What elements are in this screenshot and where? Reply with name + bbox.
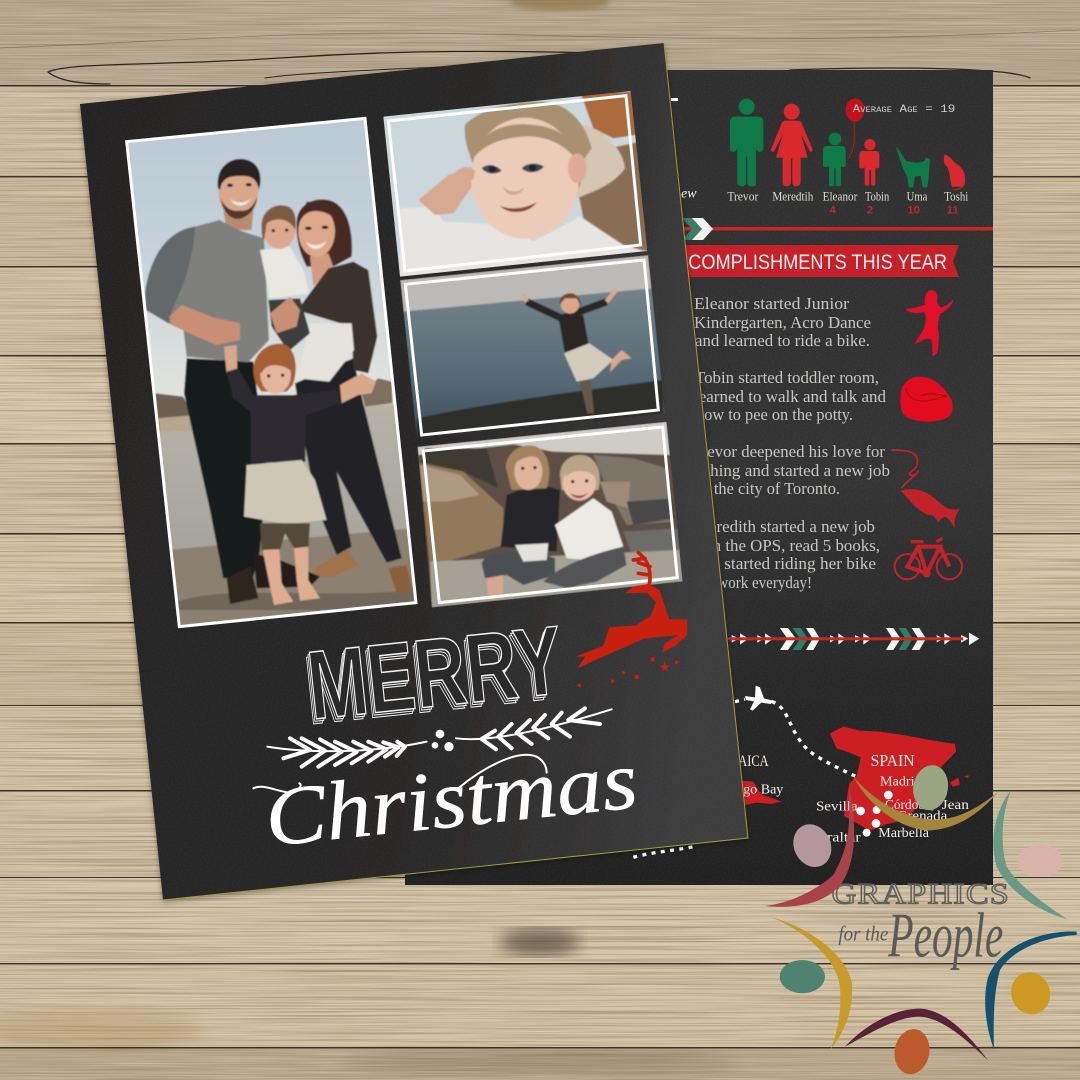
divider arrow with chevrons [670,218,993,240]
labels: family names: Tobin [865,189,890,203]
text: Tobin accomplishment: Tobin started toddler room, [695,368,879,387]
text: Meredith accomplishment [716,520,879,592]
text: Trevor accomplishment: fishing and started a new job [693,461,890,480]
text: Meredith accomplishment: and started riding her bike [695,554,876,573]
icon: potty / bean bag [900,377,953,422]
logo text: People [888,901,1003,971]
icon: Tobin figure [859,139,879,186]
text: Meredith accomplishment: to work everyday! [702,573,812,592]
map: Spain: Jean [942,797,969,812]
text: Tobin accomplishment: learned to walk and talk and [694,387,887,406]
text: Trevor accomplishment [708,445,890,498]
dancing girl [523,290,632,413]
photo: two kids on rocks [417,422,683,608]
text: Trevor accomplishment: in the city of Toronto. [697,479,840,498]
icon: dancing child [905,290,953,356]
map: Spain: Marbella [878,825,929,840]
banner: accomplishments [686,245,959,277]
flight route [633,699,880,857]
decorative branch with berries [267,708,612,767]
arrow divider with chevrons [728,628,979,650]
labels: family names: Eleanor [823,189,858,203]
labels: family names: Meredtih [772,189,814,203]
labels: family names: Toshi [944,189,969,203]
script fragment: ew [681,186,697,201]
text: Eleanor accomplishment [694,297,870,346]
labels: ages: 11 [947,205,959,217]
text: Tobin accomplishment: how to pee on the potty. [696,405,853,424]
logo figure: yellow [770,917,852,1049]
toddler [260,205,310,352]
logo figure: olive [853,762,998,831]
icon: Toshi cat [944,154,965,190]
title: MERRY: MERRY [301,608,566,743]
logo figure: maroon [845,1009,988,1077]
text: Eleanor accomplishment: Eleanor started Junior [694,294,850,313]
text: Eleanor accomplishment: and learned to ride a bike. [695,331,870,350]
man [145,159,320,604]
woman [295,199,413,593]
map: Spain: SPAIN [871,751,915,770]
logo figure: green [993,791,1067,919]
title: MERRY: MERRY [302,605,567,740]
icon: fish on a hook [892,450,960,528]
icon: airplane [745,686,773,711]
icon: Uma cat [896,147,930,187]
map: Jamaica: JAMAICA [713,753,769,770]
labels: family names: Uma [907,189,928,203]
photo: girl dancing by the water [400,255,665,438]
title: Christmas: Christmas [261,734,642,865]
text: Tobin accomplishment [694,368,887,424]
icon: red reindeer [575,553,687,687]
map: travel route [633,686,969,857]
photo: family on the beach [120,110,427,633]
logo text: for the [838,924,888,946]
icon: Eleanor figure with balloon [823,98,864,186]
map: Spain: Córdoba, [885,797,934,812]
map: Spain [817,726,970,842]
photo: toddler close up [380,85,653,285]
title: MERRY: MERRY [300,610,565,745]
labels: family names [728,192,968,200]
labels: family names: Trevor [727,189,759,203]
labels: ages: 10 [907,205,920,217]
girl [224,344,376,605]
map: Jamaica [740,756,784,805]
icon: Meredith figure [771,104,813,186]
logo figure: mauve [765,787,854,907]
text: Trevor accomplishment: Trevor deepened his love for [692,442,886,461]
text: Meredith accomplishment: Meredith started a new job [694,517,875,536]
text: Meredith accomplishment: in the OPS, read 5 books, [708,536,880,555]
text: Eleanor accomplishment: Kindergarten, Acro Dance [694,313,871,332]
logo text [832,878,1010,971]
front card: Merry Christmas [70,20,760,910]
icon: bicycle [895,538,962,579]
logo: Graphics for the People watermark [765,762,1077,1077]
map: Spain: Sevilla [816,798,858,813]
text: average age: Average Age = 19 [853,104,956,116]
labels: ages [830,206,958,214]
map: Spain: Grenada [897,808,947,823]
map: Jamaica: Montego Bay [707,781,784,796]
icon: Trevor figure [730,99,763,186]
labels: ages: 4 [829,205,836,217]
back card: family stats infographic [405,70,993,885]
map: Spain: Gibraltar [803,829,861,844]
kids [482,445,627,600]
map: Spain: Madrid [880,774,922,789]
family figures row [681,98,969,217]
logo figure: blue [985,932,1077,1049]
logo text: GRAPHICS [832,878,1010,910]
labels: ages: 2 [867,205,873,217]
banner: accomplishments: ACCOMPLISHMENTS THIS YEAR [663,251,947,274]
